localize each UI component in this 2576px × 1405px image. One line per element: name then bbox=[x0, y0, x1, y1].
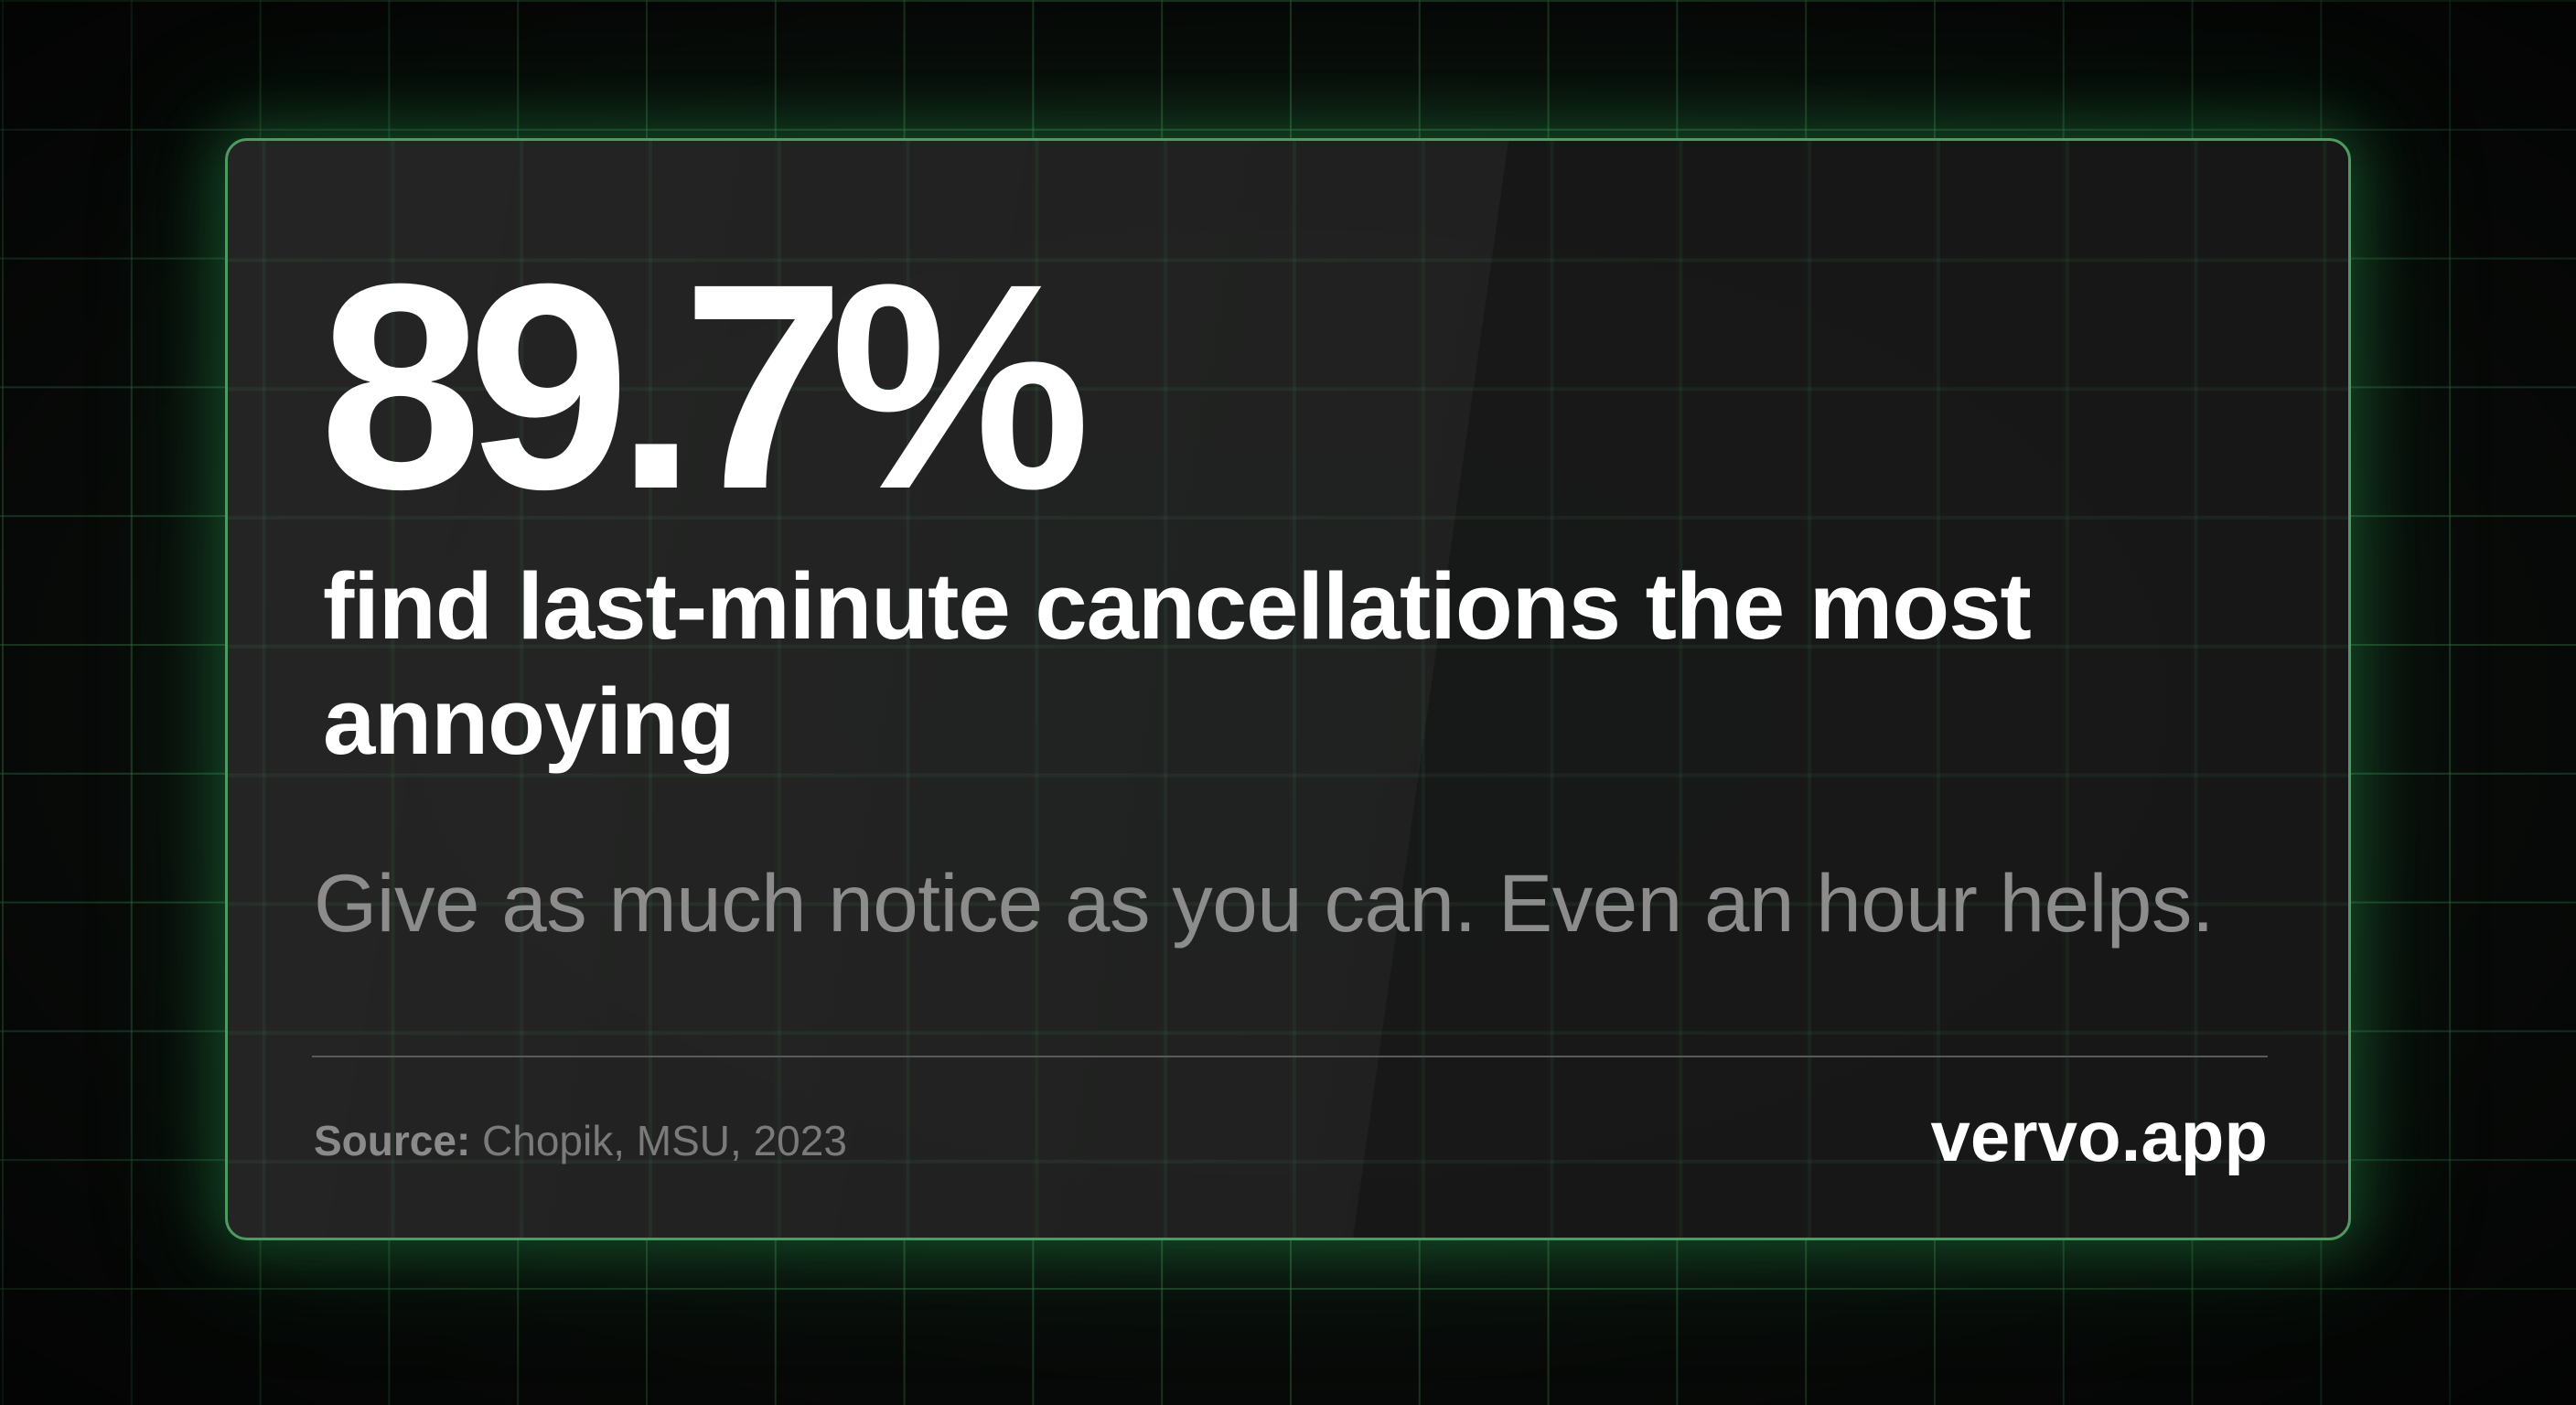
brand: vervo.app bbox=[1931, 1096, 2268, 1176]
big number: 89.7% bbox=[319, 222, 1076, 550]
statement heading: find last-minute cancellations the most bbox=[323, 553, 2031, 659]
advice text: Give as much notice as you can. Even an hour helps. bbox=[314, 857, 2214, 949]
statement heading: annoying bbox=[323, 669, 735, 774]
panel: stat card bbox=[225, 138, 2351, 1240]
divider bbox=[312, 1056, 2268, 1057]
statement heading bbox=[323, 553, 2031, 774]
source: Source: Chopik, MSU, 2023 bbox=[314, 1117, 847, 1164]
